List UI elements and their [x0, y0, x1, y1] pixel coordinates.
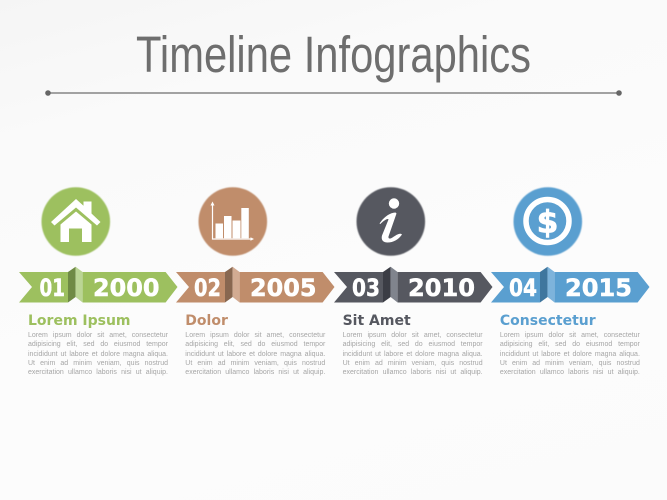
ribbon: 03 2010	[334, 266, 492, 302]
ribbon: 02 2005	[176, 266, 334, 302]
text block: incididunt ut labore et dolore magna aliqua.	[28, 351, 168, 358]
panel: step 01	[19, 186, 178, 376]
heading: Sit Amet: Sit Amet	[343, 312, 411, 328]
text block: Lorem ipsum dolor sit amet, consectetur	[500, 332, 640, 339]
text block: adipisicing elit, sed do eiusmod tempor	[343, 341, 483, 348]
text block: exercitation ullamco laboris nisi ut aliquip.	[28, 369, 168, 376]
heading: Consectetur: Consectetur	[500, 312, 596, 328]
text block: exercitation ullamco laboris nisi ut aliquip.	[343, 369, 483, 376]
ribbon: 03 2010: 2010	[408, 274, 475, 302]
ribbon: 03 2010: 03	[352, 274, 380, 302]
panel: step 03	[334, 186, 492, 376]
ribbon: 04 2015: 04	[509, 274, 537, 302]
text block: incididunt ut labore et dolore magna aliqua.	[185, 351, 325, 358]
text block: Lorem ipsum dolor sit amet, consectetur	[343, 332, 483, 339]
text block	[342, 332, 483, 376]
ribbon: 02 2005: 2005	[250, 274, 317, 302]
text block: incididunt ut labore et dolore magna aliqua.	[343, 351, 483, 358]
title divider line	[45, 90, 622, 96]
text block: Ut enim ad minim veniam, quis nostrud	[343, 360, 483, 367]
text block: adipisicing elit, sed do eiusmod tempor	[500, 341, 640, 348]
icon: bar chart	[198, 186, 268, 256]
text block	[28, 332, 168, 376]
icon: information	[356, 186, 426, 256]
ribbon: 01 2000: 2000	[93, 274, 160, 302]
text block: adipisicing elit, sed do eiusmod tempor	[28, 341, 168, 348]
text block: incididunt ut labore et dolore magna aliqua.	[500, 351, 640, 358]
icon: dollar coin: $	[537, 204, 558, 240]
ribbon: 04 2015	[491, 266, 650, 302]
panel: step 02	[176, 186, 334, 376]
text block: exercitation ullamco laboris nisi ut aliquip.	[500, 369, 640, 376]
heading: Dolor: Dolor	[185, 312, 228, 328]
text block	[185, 332, 326, 376]
text block: Ut enim ad minim veniam, quis nostrud	[500, 360, 640, 367]
ribbon: 02 2005: 02	[194, 274, 221, 302]
text block: Ut enim ad minim veniam, quis nostrud	[185, 360, 325, 367]
ribbon: 04 2015: 2015	[565, 274, 632, 302]
text block: Lorem ipsum dolor sit amet, consectetur	[28, 332, 168, 339]
ribbon: 01 2000	[19, 266, 178, 302]
text block: exercitation ullamco laboris nisi ut aliquip.	[185, 369, 325, 376]
icon: dollar coin	[512, 186, 583, 256]
panel: step 04	[491, 186, 650, 376]
ribbon: 01 2000: 01	[40, 274, 65, 302]
text block: adipisicing elit, sed do eiusmod tempor	[185, 341, 325, 348]
heading: Lorem Ipsum: Lorem Ipsum	[28, 312, 131, 328]
text block	[500, 332, 640, 376]
text block: Ut enim ad minim veniam, quis nostrud	[28, 360, 168, 367]
icon: house	[40, 186, 111, 256]
text block: Lorem ipsum dolor sit amet, consectetur	[185, 332, 325, 339]
